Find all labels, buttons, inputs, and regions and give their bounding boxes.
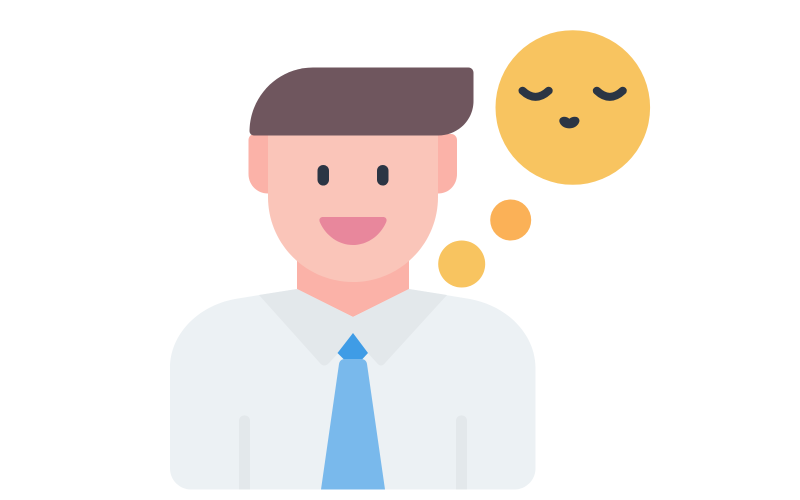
tie knot — [338, 333, 368, 360]
right ear — [436, 134, 457, 194]
emoji left closed eye — [522, 91, 549, 97]
emoji mouth — [559, 117, 579, 128]
thought bubble — [438, 30, 650, 287]
emoji: calm face — [496, 30, 650, 185]
left ear — [248, 134, 270, 194]
small bubble — [438, 240, 485, 288]
left sleeve crease — [239, 415, 250, 490]
face — [268, 130, 438, 282]
left eye — [318, 165, 329, 186]
neck — [297, 255, 409, 317]
icon: man — [170, 68, 536, 490]
smile — [319, 217, 387, 245]
medium bubble — [490, 200, 531, 240]
emoji head — [496, 30, 650, 185]
shirt collar — [259, 289, 447, 366]
shirt body — [170, 289, 536, 490]
hair — [250, 68, 474, 136]
right sleeve crease — [456, 415, 467, 490]
right eye — [377, 165, 388, 186]
emoji right closed eye — [597, 91, 623, 97]
tie blade — [321, 359, 385, 490]
